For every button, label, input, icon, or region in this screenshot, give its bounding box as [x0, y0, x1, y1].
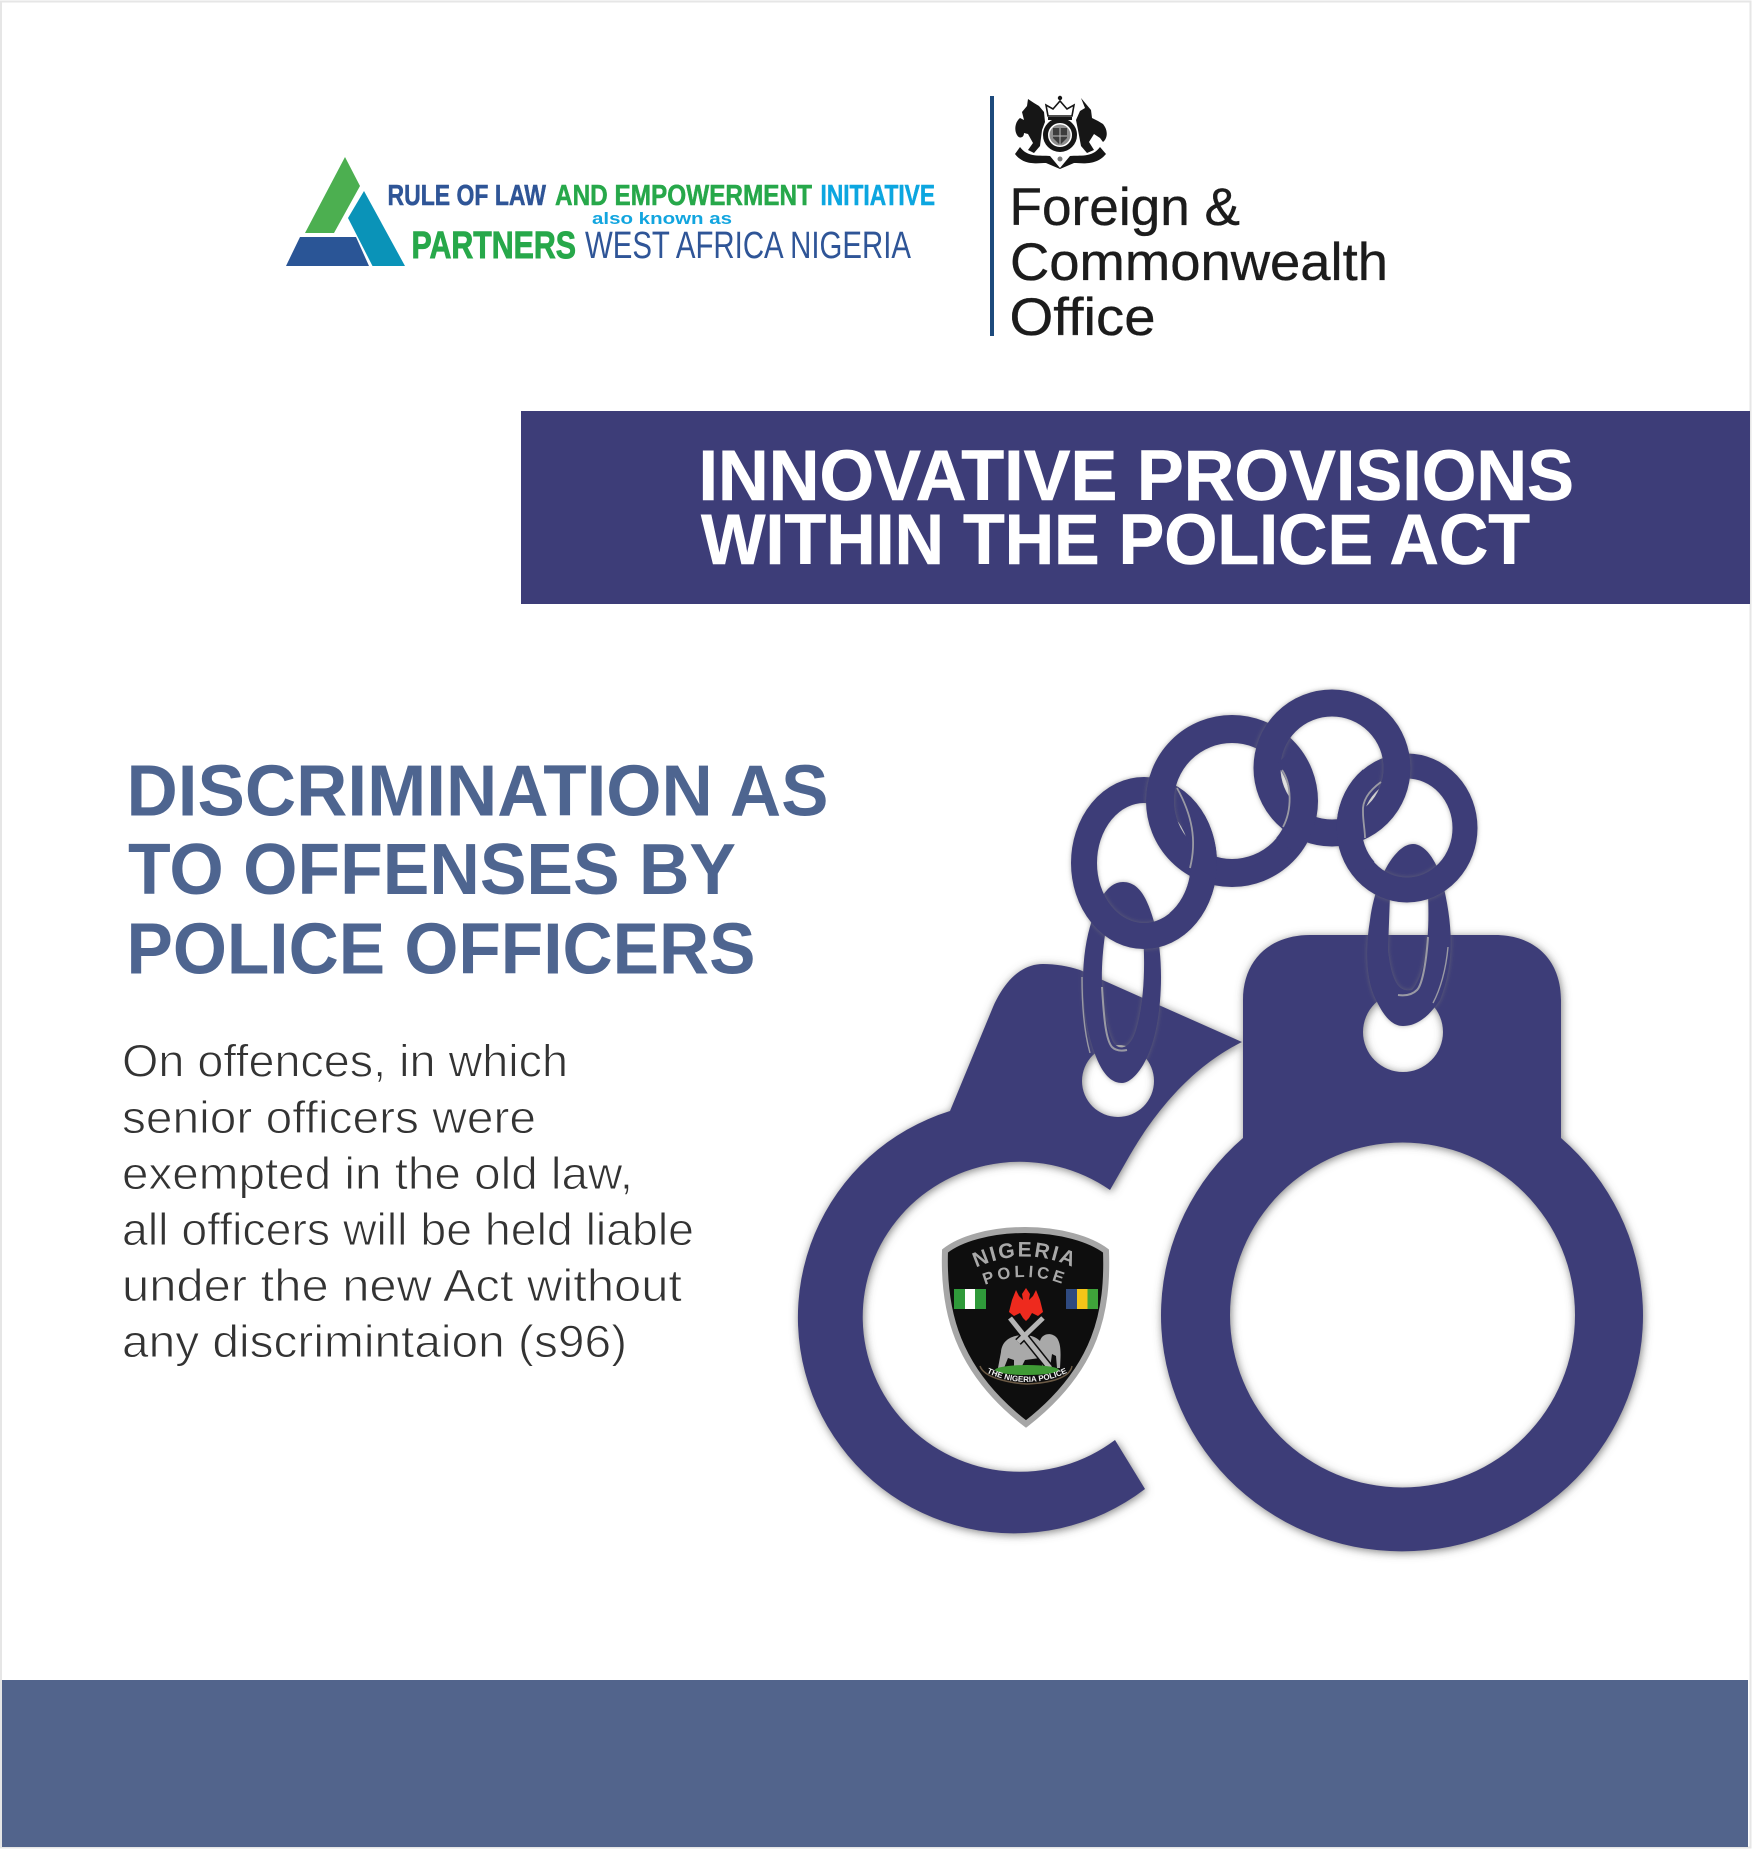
- wordmark: [1010, 178, 1388, 347]
- logo: Foreign & Commonwealth Office: [990, 96, 1388, 347]
- wordmark: Commonwealth: [1010, 233, 1388, 292]
- badge text: POLICE: POLICE: [982, 1266, 1064, 1284]
- flag: Nigeria: [954, 1289, 986, 1309]
- body text: under the new Act without: [122, 1260, 683, 1311]
- left link: [1083, 882, 1161, 1083]
- logo text line 1: INITIATIVE: [820, 180, 935, 212]
- wordmark: Office: [1010, 288, 1156, 347]
- wordmark: Foreign &: [1010, 178, 1240, 237]
- logo text line 1: [388, 180, 935, 212]
- icon: elephant: [998, 1334, 1061, 1368]
- left cuff: [798, 964, 1242, 1533]
- body text: all officers will be held liable: [122, 1204, 694, 1255]
- body text: senior officers were: [122, 1092, 536, 1143]
- motto ribbon: [980, 1366, 1072, 1384]
- heading: discrimination as to offenses: DISCRIMINATION AS: [126, 752, 828, 832]
- body text: [122, 1036, 694, 1367]
- body text: any discrimintaion (s96): [122, 1316, 627, 1367]
- illustration: handcuffs: [798, 703, 1643, 1551]
- flag: police colours: [1066, 1289, 1098, 1309]
- divider bar: [990, 96, 994, 336]
- heading: discrimination as to offenses: TO OFFENSES BY: [128, 830, 736, 910]
- link highlights: [1082, 770, 1448, 1053]
- title: WITHIN THE POLICE ACT: [701, 501, 1530, 580]
- green mound: [995, 1365, 1059, 1375]
- badge text: NIGERIA: NIGERIA: [972, 1242, 1072, 1267]
- logo: Rule of Law and Empowerment Initiative: [286, 157, 935, 267]
- motto text: THE NIGERIA POLICE: [988, 1368, 1067, 1382]
- logo text line 1: RULE OF LAW: [388, 180, 546, 212]
- logo text line 3: WEST AFRICA NIGERIA: [585, 225, 911, 267]
- logo text line 1: AND EMPOWERMENT: [555, 180, 812, 212]
- badge: Nigeria Police shield: [942, 1227, 1110, 1428]
- body text: exempted in the old law,: [122, 1148, 633, 1199]
- title: [698, 437, 1574, 580]
- logo text line 3: PARTNERS: [412, 225, 576, 267]
- chain rings: [1084, 703, 1465, 936]
- icon: crossed bands: [1010, 1318, 1050, 1368]
- right link: [1367, 844, 1451, 1026]
- logo text line 2: also known as: [592, 209, 732, 228]
- icon: tri-colour triangle: [286, 157, 405, 266]
- title banner: [521, 411, 1750, 604]
- shield: [945, 1230, 1106, 1424]
- footer band: [2, 1680, 1748, 1847]
- right cuff: [1161, 935, 1643, 1551]
- icon: red eagle: [1009, 1288, 1043, 1321]
- logo text line 3: [412, 225, 911, 267]
- icon: royal coat of arms: [1015, 96, 1107, 169]
- body text: On offences, in which: [122, 1036, 568, 1086]
- title: INNOVATIVE PROVISIONS: [698, 437, 1574, 516]
- heading: discrimination as to offenses: POLICE OFFICERS: [126, 910, 756, 990]
- heading: discrimination as to offenses: [126, 752, 828, 990]
